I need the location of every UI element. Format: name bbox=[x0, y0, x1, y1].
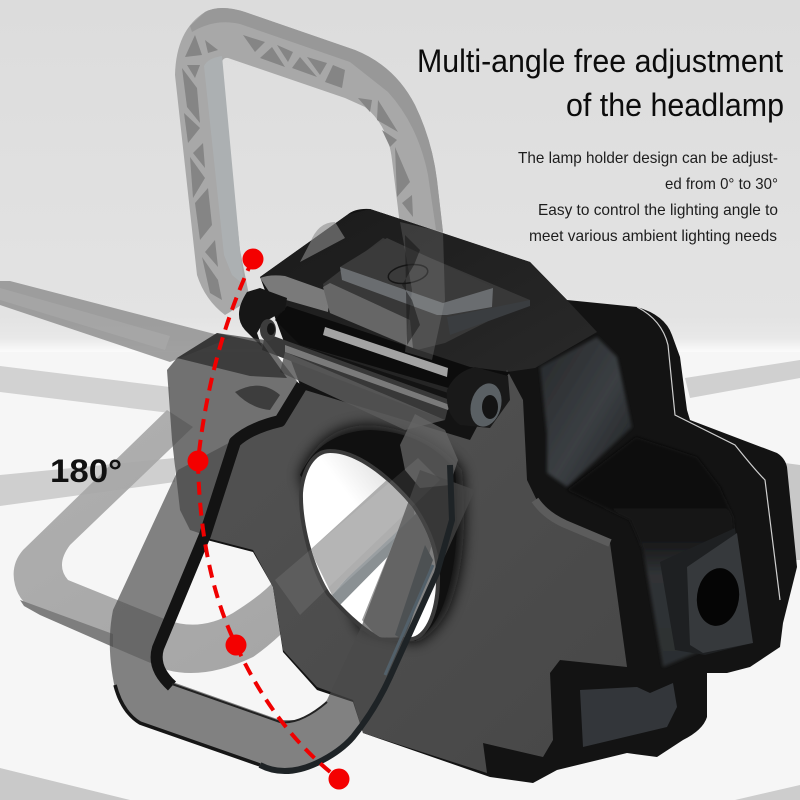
handle lower edge shading bbox=[20, 600, 113, 647]
right hinge arm bbox=[400, 414, 458, 488]
title: of the headlamp bbox=[566, 87, 784, 123]
transparent left hinge housing bbox=[167, 333, 300, 535]
lower lobe bbox=[580, 683, 677, 747]
description text: Easy to control the lighting angle to bbox=[538, 202, 778, 219]
front face bbox=[203, 370, 627, 773]
connector hole bbox=[693, 565, 743, 629]
power button bbox=[323, 238, 530, 350]
outer rim highlight bbox=[637, 307, 780, 600]
hinge slot bbox=[275, 306, 510, 400]
front handle in foreground bbox=[110, 385, 475, 771]
left hinge knuckle bbox=[239, 288, 287, 347]
marker 1 bbox=[242, 248, 264, 270]
side surface right lobe bbox=[567, 437, 743, 667]
hinge rod bbox=[262, 333, 450, 420]
description text: meet various ambient lighting needs bbox=[529, 228, 777, 245]
title bbox=[417, 43, 784, 123]
lens shadow blur bbox=[300, 425, 464, 643]
inner lip bbox=[204, 56, 244, 285]
top surface bbox=[260, 209, 597, 400]
hinge light strip bbox=[323, 327, 448, 377]
title: Multi-angle free adjustment bbox=[417, 43, 783, 79]
description text: ed from 0° to 30° bbox=[665, 176, 778, 193]
upright handle position with truss bbox=[175, 8, 444, 315]
body silhouette bbox=[203, 209, 797, 783]
lens housing bbox=[300, 430, 457, 641]
ghost of flattened handle over body bbox=[275, 458, 440, 615]
ghost of upright handle over body bbox=[400, 222, 445, 360]
description text: The lamp holder design can be adjust- bbox=[518, 150, 778, 167]
headlamp body bbox=[203, 209, 797, 783]
face shaded corner rim bbox=[535, 500, 610, 543]
marker 3 bbox=[226, 634, 246, 656]
angle label: 180° bbox=[50, 453, 122, 489]
side surface upper lobe bbox=[540, 337, 632, 487]
marker 4 bbox=[328, 768, 350, 790]
handle outer rim bbox=[115, 685, 260, 765]
handle dark inner rim bbox=[157, 385, 302, 686]
connector block bbox=[660, 528, 753, 655]
marker 2 bbox=[188, 450, 208, 472]
edge-on handle position bbox=[0, 281, 230, 362]
rotation arc: red dashed path bbox=[188, 248, 350, 790]
right hinge knuckle bbox=[447, 367, 510, 430]
lens opening bbox=[299, 449, 440, 641]
flattened handle position (180 degrees) bbox=[14, 410, 440, 673]
description text bbox=[518, 150, 778, 245]
truss triangles bbox=[182, 35, 413, 300]
